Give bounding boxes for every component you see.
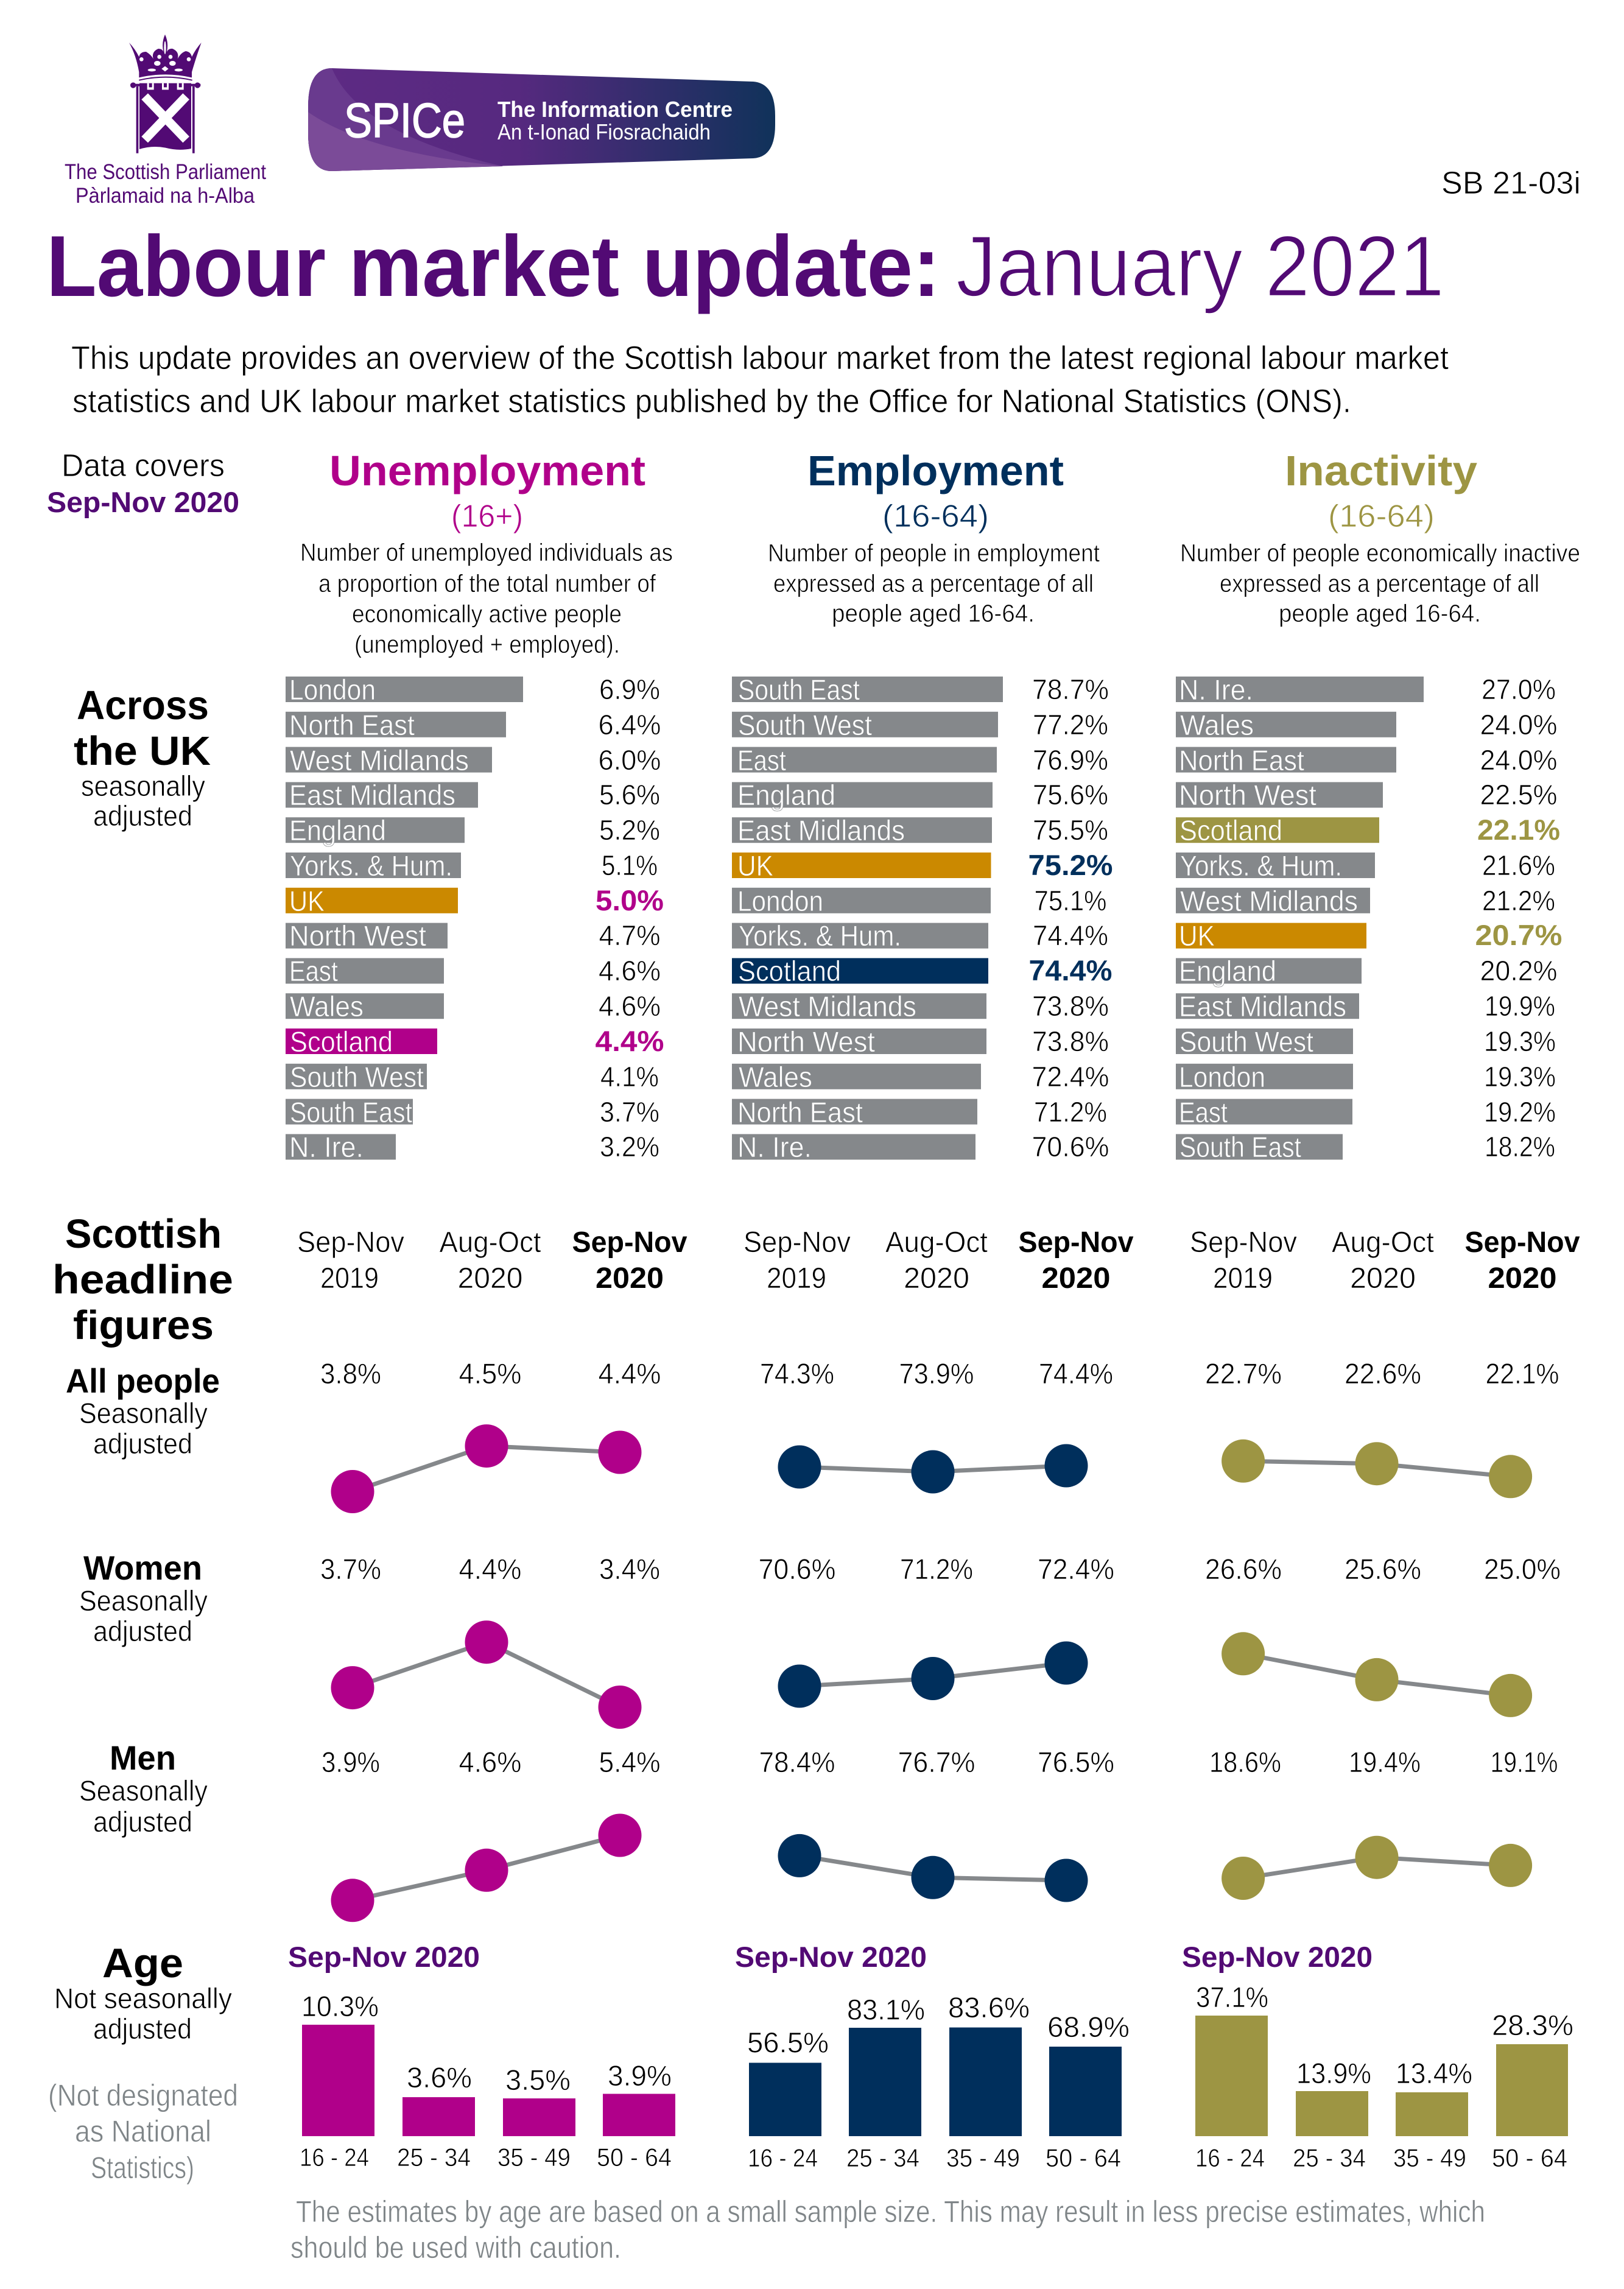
row: South East: 3.7%	[600, 1096, 659, 1128]
line chart: inactivity, men: 19.4%	[1349, 1746, 1421, 1778]
line chart: employment, men	[759, 1746, 1114, 1902]
row label: All people: adjusted	[93, 1427, 192, 1460]
row: UK: UK	[737, 849, 773, 882]
line chart: employment, women: 70.6%	[759, 1553, 835, 1585]
row: West Midlands: West Midlands	[1180, 885, 1358, 917]
heading: Inactivity: Inactivity	[1285, 447, 1477, 494]
row: North East: North East	[737, 1096, 863, 1128]
bar chart: employment by age	[735, 1941, 1130, 2172]
section label: Age: as National	[75, 2114, 211, 2148]
badge line: Gaelic: An t-Ionad Fiosrachaidh	[497, 119, 711, 144]
bar chart: inactivity by age: 28.3%	[1492, 2009, 1573, 2041]
row: Wales	[732, 1061, 1109, 1093]
bar chart: inactivity by age: 25 - 34	[1293, 2143, 1366, 2172]
intro text: This update provides an overview of the Scottish labour market from the latest regional labour market	[71, 340, 1449, 376]
line chart: unemployment, men: 3.9%	[322, 1746, 380, 1778]
line chart: inactivity, men: 19.1%	[1491, 1746, 1558, 1778]
row: North East: 24.0%	[1480, 744, 1558, 776]
heading: Unemployment: (unemployed + employed).	[354, 630, 620, 658]
row: UK	[1176, 919, 1562, 952]
row label: Women: Seasonally	[79, 1584, 208, 1617]
row label: Women: adjusted	[93, 1615, 192, 1647]
row label: Men	[79, 1739, 208, 1838]
bar chart: inactivity by age: 35 - 49	[1393, 2143, 1466, 2172]
section label: Across the UK: seasonally	[81, 770, 205, 802]
row label: All people: Seasonally	[79, 1397, 208, 1429]
row: North West	[1176, 779, 1558, 811]
row: England: England	[1179, 955, 1276, 987]
row: East	[732, 744, 1108, 776]
bar chart: inactivity by age: 16 - 24	[1195, 2143, 1265, 2172]
line chart: inactivity, women	[1205, 1553, 1561, 1717]
period headers: inactivity: 2020	[1350, 1262, 1416, 1295]
row: Yorks. & Hum.: Yorks. & Hum.	[1180, 849, 1342, 882]
period headers: unemployment: 2020	[596, 1262, 664, 1295]
row: South West: 19.3%	[1484, 1025, 1556, 1057]
line chart: employment, all people: 73.9%	[899, 1357, 974, 1390]
row: South West: South West	[738, 709, 872, 741]
row: Yorks. & Hum.: 21.6%	[1482, 849, 1555, 881]
row: North West: 22.5%	[1480, 779, 1558, 810]
row: N. Ire.	[732, 1131, 1109, 1163]
row: North West: North West	[1179, 779, 1316, 811]
intro text	[71, 340, 1449, 420]
line chart: employment, all people	[760, 1357, 1113, 1493]
row label: Women	[79, 1549, 208, 1647]
row: South East: South East	[738, 673, 860, 706]
row: East Midlands: East Midlands	[1179, 990, 1346, 1022]
bar chart: unemployment by age: 3.9%	[608, 2059, 672, 2092]
heading: Inactivity: (16-64)	[1328, 499, 1435, 534]
period headers: inactivity	[1190, 1226, 1580, 1295]
period headers: unemployment: Sep-Nov	[572, 1226, 687, 1259]
section label: Age	[48, 1940, 238, 2185]
row: South East: South East	[1179, 1131, 1301, 1163]
row: East Midlands: 75.5%	[1033, 814, 1108, 846]
row: South West	[1176, 1025, 1556, 1058]
line chart: unemployment, all people: 4.5%	[459, 1357, 521, 1390]
line chart: unemployment, women: 4.4%	[459, 1553, 521, 1585]
heading: Unemployment	[300, 447, 673, 658]
row: South East: 78.7%	[1032, 673, 1109, 705]
section label: Scottish headline figures: headline	[52, 1257, 233, 1303]
row: North East	[732, 1096, 1107, 1128]
period headers: employment: 2019	[767, 1262, 826, 1295]
line chart: inactivity, all people: 22.1%	[1486, 1357, 1559, 1390]
row: UK	[732, 849, 1113, 882]
row: Scotland	[286, 1025, 664, 1058]
section label: Age: (Not designated	[48, 2078, 238, 2112]
line chart: employment, men: 78.4%	[759, 1746, 835, 1778]
row: West Midlands	[1176, 885, 1555, 917]
row: Yorks. & Hum.: Yorks. & Hum.	[739, 919, 901, 952]
bar chart: inactivity by age: 50 - 64	[1492, 2143, 1567, 2172]
line chart: employment, all people: 74.3%	[760, 1357, 834, 1390]
row: North West: North West	[289, 919, 426, 952]
row: Scotland: 22.1%	[1477, 814, 1560, 846]
row: East: East	[1179, 1096, 1228, 1128]
row: London	[732, 885, 1107, 917]
line chart: inactivity, women: 26.6%	[1205, 1553, 1282, 1585]
period headers: unemployment	[297, 1226, 687, 1295]
row: Yorks. & Hum.: 74.4%	[1033, 919, 1108, 951]
line chart: unemployment, men: 4.6%	[459, 1746, 521, 1778]
bar chart: unemployment by age: 10.3%	[301, 1990, 379, 2022]
line chart: unemployment, all people: 3.8%	[320, 1357, 381, 1390]
line chart: inactivity, men	[1209, 1746, 1558, 1900]
row: Wales: 24.0%	[1480, 709, 1558, 740]
period headers: employment: 2020	[904, 1262, 969, 1295]
bar chart: inactivity across the UK	[1176, 673, 1562, 1163]
bar chart: employment by age: 68.9%	[1047, 2011, 1130, 2043]
row: West Midlands	[732, 990, 1109, 1022]
heading: Inactivity	[1180, 447, 1580, 627]
bar chart: employment across the UK	[732, 673, 1113, 1163]
line chart: unemployment, all people: 4.4%	[598, 1357, 661, 1390]
row: Wales: 72.4%	[1032, 1061, 1109, 1092]
row: West Midlands: 6.0%	[598, 744, 661, 776]
row: West Midlands: West Midlands	[739, 990, 916, 1022]
row: South West: South West	[1179, 1025, 1313, 1058]
heading: Employment: Employment	[807, 447, 1064, 494]
bar chart: unemployment by age: 50 - 64	[597, 2143, 672, 2171]
row: UK: UK	[289, 885, 325, 917]
line chart: employment, men: 76.5%	[1038, 1746, 1114, 1778]
heading: Employment: people aged 16-64.	[832, 599, 1035, 627]
row: Scotland: Scotland	[738, 955, 841, 987]
bar chart: inactivity by age: 13.4%	[1396, 2057, 1472, 2089]
heading: Unemployment: economically active people	[352, 600, 622, 628]
row: England: England	[737, 779, 835, 811]
section label: Scottish headline figures	[52, 1211, 233, 1348]
heading: Inactivity: people aged 16-64.	[1279, 599, 1481, 627]
row: N. Ire.: N. Ire.	[1179, 673, 1253, 706]
row: UK: 5.0%	[596, 884, 664, 916]
bar chart: employment by age: 25 - 34	[846, 2143, 919, 2172]
row: UK: 75.2%	[1028, 849, 1113, 881]
bar chart: employment by age: 50 - 64	[1046, 2143, 1121, 2172]
row: East Midlands: East Midlands	[737, 814, 905, 846]
bar chart: inactivity by age: 13.9%	[1296, 2057, 1371, 2089]
bar chart: unemployment by age: 35 - 49	[497, 2143, 571, 2171]
title: Labour market update:	[46, 218, 940, 315]
line chart: employment, women	[759, 1553, 1114, 1707]
row: East: East	[737, 744, 786, 776]
row: South East: 18.2%	[1485, 1131, 1555, 1162]
section label: Across the UK: the UK	[74, 728, 211, 774]
line chart: unemployment, women: 3.4%	[599, 1553, 660, 1585]
row: Wales: Wales	[739, 1061, 812, 1093]
row: England: 5.2%	[599, 814, 660, 846]
section label: Age: Not seasonally	[54, 1982, 232, 2014]
row: East Midlands: East Midlands	[289, 779, 455, 811]
row: West Midlands: West Midlands	[290, 744, 469, 776]
period headers: employment: Aug-Oct	[885, 1226, 988, 1259]
row: East Midlands: 19.9%	[1485, 990, 1555, 1022]
row: South East: South East	[290, 1096, 412, 1128]
heading: Unemployment: Number of unemployed individuals as	[300, 538, 673, 566]
section label: Scottish headline figures: Scottish	[65, 1211, 222, 1257]
period headers: inactivity: Sep-Nov	[1190, 1226, 1297, 1259]
row: London: 19.3%	[1484, 1061, 1556, 1092]
row: Wales: Wales	[1180, 709, 1254, 741]
row: Wales	[286, 990, 661, 1022]
row: West Midlands: 73.8%	[1032, 990, 1109, 1022]
row: South West: South West	[290, 1061, 424, 1093]
period headers: unemployment: 2020	[458, 1262, 522, 1295]
row: North West	[286, 919, 660, 952]
row: East: East	[289, 955, 338, 987]
row: North West: North West	[737, 1025, 875, 1058]
row: West Midlands	[286, 744, 661, 776]
row: North East: 71.2%	[1034, 1096, 1107, 1128]
row label: Men: Seasonally	[79, 1774, 208, 1807]
row: East Midlands: 5.6%	[599, 779, 660, 810]
row: Yorks. & Hum.	[732, 919, 1108, 952]
bar chart: inactivity by age: 37.1%	[1196, 1981, 1268, 2013]
bar chart: unemployment by age: 16 - 24	[300, 2143, 369, 2171]
bar chart: employment by age: 83.1%	[847, 1994, 925, 2025]
row: Yorks. & Hum.	[286, 849, 658, 882]
period headers: unemployment: 2019	[320, 1262, 379, 1295]
row: South West	[286, 1061, 659, 1093]
period headers: employment: 2020	[1041, 1262, 1111, 1295]
row: UK	[286, 884, 664, 917]
row: N. Ire.: 3.2%	[600, 1131, 659, 1162]
row: North West	[732, 1025, 1109, 1058]
row label: Women: Women	[83, 1549, 202, 1587]
row: Scotland: 74.4%	[1029, 954, 1112, 986]
heading: Employment: (16-64)	[882, 499, 989, 534]
row: South West	[732, 709, 1108, 741]
line chart: employment, women: 72.4%	[1038, 1553, 1114, 1585]
period headers: employment: Sep-Nov	[743, 1226, 851, 1259]
data period note: Data covers	[62, 448, 225, 483]
line chart: unemployment, women	[320, 1553, 660, 1729]
footnote: should be used with caution.	[290, 2231, 621, 2265]
row: Yorks. & Hum.: Yorks. & Hum.	[290, 849, 452, 882]
line chart: employment, all people: 74.4%	[1039, 1357, 1113, 1390]
section label: Scottish headline figures: figures	[73, 1303, 214, 1348]
logo: SPICe badge	[308, 68, 775, 171]
row: North East: 6.4%	[598, 709, 661, 740]
bar chart: inactivity by age: Sep-Nov 2020	[1182, 1941, 1373, 1973]
bar chart: inactivity by age	[1182, 1941, 1573, 2172]
row: London	[1176, 1061, 1556, 1093]
period headers: employment	[743, 1226, 1134, 1295]
line chart: employment, men: 76.7%	[898, 1746, 975, 1778]
heading: Unemployment: (16+)	[451, 499, 523, 534]
row: South West: 77.2%	[1033, 709, 1108, 740]
logo text: English name: The Scottish Parliament	[65, 160, 266, 184]
data period note: Sep-Nov 2020	[47, 486, 239, 518]
data period note	[47, 448, 239, 518]
SPICe wordmark: SPICe	[344, 93, 465, 147]
period headers: inactivity: 2020	[1488, 1262, 1556, 1295]
row: East	[1176, 1096, 1556, 1128]
row: North East	[1176, 744, 1558, 776]
row: London	[286, 673, 660, 706]
row: Scotland: Scotland	[1179, 814, 1282, 846]
section label: Across the UK	[74, 683, 211, 832]
icon: crown and banner crest	[129, 35, 202, 153]
row: North East: North East	[1179, 744, 1304, 776]
row: West Midlands: 21.2%	[1482, 885, 1555, 916]
line chart: inactivity, all people	[1205, 1357, 1559, 1498]
row: England: 20.2%	[1480, 955, 1558, 986]
row label: Men: adjusted	[93, 1806, 192, 1838]
row: England	[1176, 955, 1558, 987]
row: England	[286, 814, 660, 846]
row: South West: 4.1%	[600, 1061, 659, 1092]
period headers: unemployment: Aug-Oct	[440, 1226, 541, 1259]
logo: Scottish Parliament crest and name	[65, 35, 266, 208]
row: North West: 73.8%	[1032, 1025, 1109, 1057]
period headers: inactivity: Sep-Nov	[1465, 1226, 1580, 1259]
intro text: statistics and UK labour market statistics published by the Office for National Statistics (ONS).	[72, 383, 1351, 420]
row: N. Ire.	[286, 1131, 659, 1163]
bar chart: unemployment by age: 3.6%	[407, 2061, 472, 2094]
bar chart: employment by age: 83.6%	[948, 1991, 1030, 2024]
badge line: The Information Centre: The Information Centre	[497, 97, 733, 122]
section label: Across the UK: adjusted	[93, 800, 192, 832]
row: Yorks. & Hum.: 5.1%	[602, 849, 658, 881]
period headers: unemployment: Sep-Nov	[297, 1226, 404, 1259]
row: East: 76.9%	[1033, 744, 1108, 776]
row: N. Ire.: N. Ire.	[289, 1131, 364, 1163]
section label: Age: adjusted	[93, 2013, 192, 2045]
heading: Employment	[768, 447, 1100, 627]
line chart: unemployment, women: 3.7%	[320, 1553, 381, 1585]
line chart: inactivity, men: 18.6%	[1209, 1746, 1281, 1778]
line chart: inactivity, all people: 22.6%	[1345, 1357, 1421, 1390]
row: East Midlands	[732, 814, 1108, 846]
row label: Men: Men	[110, 1739, 176, 1777]
row label: All people	[66, 1362, 220, 1460]
row: London: 75.1%	[1034, 885, 1107, 916]
row: South East	[732, 673, 1109, 706]
heading: Inactivity: Number of people economically inactive	[1180, 539, 1580, 567]
title	[46, 218, 1444, 315]
row: England	[732, 779, 1108, 811]
row: Scotland	[732, 954, 1112, 987]
row: East: 19.2%	[1484, 1096, 1556, 1128]
row: South East	[286, 1096, 659, 1128]
row: England: England	[289, 814, 386, 846]
row: East Midlands	[1176, 990, 1555, 1022]
row: UK: 20.7%	[1475, 919, 1562, 951]
row: London: London	[737, 885, 823, 917]
period headers: inactivity: Aug-Oct	[1332, 1226, 1434, 1259]
row: East Midlands	[286, 779, 660, 811]
line chart: employment, women: 71.2%	[900, 1553, 973, 1585]
row: UK: UK	[1179, 919, 1215, 952]
bar chart: unemployment by age: 3.5%	[505, 2064, 571, 2096]
document reference: SB 21-03i	[1441, 166, 1581, 201]
title: January 2021	[956, 218, 1444, 315]
bar chart: employment by age: 56.5%	[747, 2027, 829, 2058]
row: N. Ire.: 70.6%	[1032, 1131, 1109, 1162]
row label: All people: All people	[66, 1362, 220, 1400]
period headers: inactivity: 2019	[1213, 1262, 1273, 1295]
bar chart: unemployment by age	[288, 1941, 675, 2171]
bar chart: unemployment across the UK	[286, 673, 664, 1163]
logo text: Gaelic name: Pàrlamaid na h-Alba	[76, 184, 255, 208]
line chart: inactivity, all people: 22.7%	[1205, 1357, 1282, 1390]
row: Scotland: 4.4%	[596, 1025, 664, 1057]
row: East: 4.6%	[599, 955, 661, 986]
line chart: inactivity, women: 25.0%	[1484, 1553, 1561, 1585]
row: South East	[1176, 1131, 1555, 1163]
row: Wales: 4.6%	[599, 990, 661, 1022]
row: London: 6.9%	[599, 673, 660, 705]
bar chart: employment by age: 16 - 24	[748, 2143, 818, 2172]
bar chart: employment by age: Sep-Nov 2020	[735, 1941, 927, 1973]
row: England: 75.6%	[1033, 779, 1108, 810]
row: Wales	[1176, 709, 1558, 741]
row: N. Ire.: N. Ire.	[737, 1131, 812, 1163]
bar chart: employment by age: 35 - 49	[946, 2143, 1020, 2172]
section label: Age: Age	[102, 1940, 183, 1986]
row: North East	[286, 709, 661, 741]
footnote	[290, 2195, 1485, 2265]
heading: Inactivity: expressed as a percentage of all	[1220, 569, 1539, 597]
section label: Age: Statistics)	[91, 2151, 194, 2185]
row: Scotland: Scotland	[290, 1025, 393, 1058]
row: Wales: Wales	[290, 990, 364, 1022]
row: East	[286, 955, 661, 987]
bar chart: unemployment by age: Sep-Nov 2020	[288, 1941, 480, 1973]
heading: Unemployment: Unemployment	[329, 447, 645, 494]
line chart: inactivity, women: 25.6%	[1345, 1553, 1421, 1585]
row: North East: North East	[289, 709, 415, 741]
row: N. Ire.	[1176, 673, 1556, 706]
heading: Unemployment: a proportion of the total number of	[318, 569, 656, 597]
line chart: unemployment, men	[322, 1746, 660, 1922]
line chart: unemployment, men: 5.4%	[599, 1746, 660, 1778]
line chart: unemployment, all people	[320, 1357, 661, 1513]
row: London: London	[289, 673, 376, 706]
heading: Employment: Number of people in employment	[768, 539, 1100, 567]
row: Yorks. & Hum.	[1176, 849, 1555, 882]
row: N. Ire.: 27.0%	[1482, 673, 1556, 705]
row: North West: 4.7%	[599, 919, 660, 951]
row: Scotland	[1176, 814, 1560, 846]
period headers: employment: Sep-Nov	[1018, 1226, 1134, 1259]
heading: Employment: expressed as a percentage of all	[773, 569, 1094, 597]
bar chart: unemployment by age: 25 - 34	[397, 2143, 471, 2171]
section label: Across the UK: Across	[77, 683, 209, 728]
row: London: London	[1179, 1061, 1265, 1093]
